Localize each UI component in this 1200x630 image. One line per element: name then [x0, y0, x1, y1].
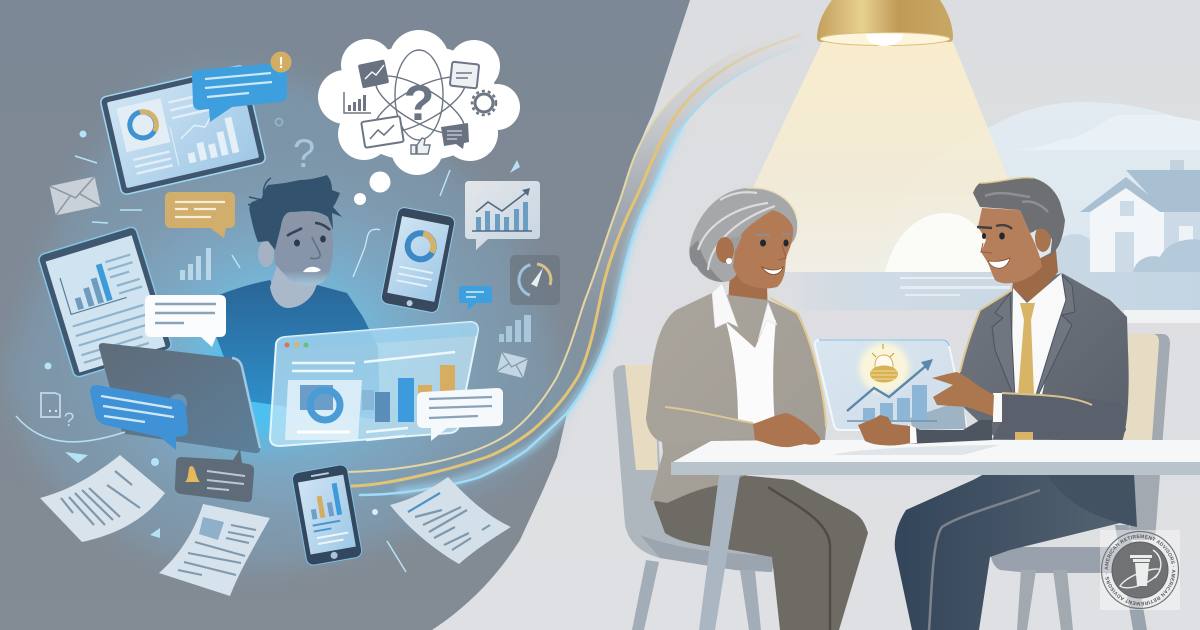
jacket lower [1046, 473, 1137, 527]
chair: advisor [990, 334, 1170, 630]
face [978, 208, 1042, 283]
flying paper 1 [40, 455, 165, 542]
ear [716, 237, 734, 263]
eyes [755, 234, 790, 260]
outer cream line [340, 30, 790, 472]
icon: gear [472, 91, 496, 115]
flowing transition lines [340, 30, 803, 495]
donut chart [116, 98, 170, 152]
window sky and clouds [877, 102, 1200, 272]
mouth [303, 267, 321, 272]
bars [362, 365, 455, 422]
logo ring text: AMERICAN RETIREMENT ADVISORS · AMERICAN RETIREMENT ADVISORS · [1104, 534, 1176, 606]
eyes [977, 225, 1012, 253]
advisor man [895, 178, 1137, 630]
icon: document with question [41, 393, 74, 431]
icon: thumbs up [411, 138, 430, 154]
trouser crease [768, 487, 830, 630]
advisor arms and hands [858, 372, 1002, 445]
pointing hand [932, 372, 994, 416]
shadow through glass [910, 400, 966, 430]
small bars right [499, 315, 531, 342]
speech bubble: growth chart [465, 181, 540, 250]
chair legs [632, 560, 761, 630]
suit [956, 273, 1129, 442]
gauge icon [510, 255, 560, 305]
lower hand [858, 415, 910, 445]
ear [1035, 224, 1051, 252]
bar chart [166, 97, 239, 166]
speech bubble: white right [417, 388, 503, 441]
face [733, 210, 793, 288]
speech bubble: blue with alert: ! [278, 55, 284, 72]
chair legs [1017, 570, 1073, 630]
small sparkles [45, 131, 520, 572]
blue line [360, 45, 803, 495]
thought cloud [318, 30, 520, 175]
lapels [992, 275, 1075, 408]
trousers [895, 473, 1136, 630]
advisor sleeve right [992, 393, 1126, 443]
stray hair [248, 178, 271, 205]
lamp light cone [740, 42, 1018, 272]
speech bubble: gold [165, 192, 235, 238]
icon: mini window [450, 62, 479, 88]
logo badge [1100, 530, 1180, 610]
speech bubble: blue lower [90, 385, 188, 450]
smile [762, 267, 783, 274]
laptop back [99, 343, 260, 453]
ear [258, 241, 274, 267]
tie [1015, 303, 1035, 440]
icon: envelope right [497, 352, 528, 378]
forearm [646, 412, 757, 442]
cuffs [993, 393, 1002, 422]
hair [973, 178, 1065, 258]
hair strands [698, 192, 775, 270]
phone: upper [380, 206, 456, 314]
worry line near man [353, 229, 380, 277]
bars [863, 385, 927, 420]
house [1053, 160, 1200, 278]
transition band between lines [540, 40, 803, 420]
speech bubble: white left [145, 295, 226, 347]
smile [988, 258, 1010, 268]
chair: woman [613, 365, 774, 630]
trouser fold [929, 490, 1040, 630]
icon: mini chart [358, 59, 389, 88]
icon: chat [441, 123, 469, 149]
donut chart [405, 231, 436, 261]
ceiling lamp [817, 0, 953, 46]
neck [1012, 250, 1058, 303]
small ring [276, 118, 282, 126]
cardigan [646, 293, 826, 503]
blouse [726, 320, 776, 424]
shirt [1012, 273, 1066, 432]
neck [727, 272, 768, 350]
table [671, 440, 1200, 630]
earring [726, 258, 732, 264]
hair [689, 188, 797, 282]
swoosh line left [16, 416, 125, 442]
gold line [350, 35, 800, 486]
thought bubbles [354, 172, 390, 205]
woman hands on table [753, 413, 820, 447]
face [274, 212, 333, 285]
browser window [270, 322, 478, 446]
tangled orbits [368, 50, 472, 145]
eyes and brows [287, 223, 330, 259]
logo column [1130, 555, 1152, 586]
small blue bubble [459, 286, 492, 310]
icon: browser chart [361, 116, 404, 148]
stressed man [210, 175, 380, 420]
neck [270, 262, 320, 308]
flying paper 2 [159, 504, 270, 596]
icon: document with question: ? [64, 410, 74, 431]
forearm [907, 420, 992, 444]
scene: hill, sea and house [784, 160, 1200, 323]
woman client [646, 188, 868, 630]
icon: envelope left [50, 177, 101, 215]
donut panel [285, 380, 362, 440]
hair highlights [985, 193, 1048, 212]
blue glow behind devices [5, 70, 557, 575]
trousers [654, 470, 868, 630]
bell notification bubble [175, 449, 254, 502]
flying paper 3 [390, 477, 511, 564]
hair [249, 175, 342, 250]
cardigan gold edges [770, 298, 826, 427]
tie tail [1015, 432, 1033, 440]
collar [712, 283, 777, 340]
glow and nest egg [859, 343, 909, 393]
table legs [699, 475, 740, 630]
tablet: left report [38, 226, 172, 378]
speech bubble: blue with alert [192, 52, 292, 122]
glass tablet with nest egg chart [815, 340, 966, 430]
phone: lower [291, 464, 363, 566]
small bars [180, 248, 211, 280]
left panel: grey overload background [0, 0, 690, 630]
floating question mark: ? [293, 132, 315, 176]
question mark: ? [404, 75, 434, 131]
icon: bars [344, 92, 371, 113]
shirt [210, 280, 380, 420]
tablet: top dashboard [100, 65, 266, 195]
rising arrow [847, 365, 927, 411]
